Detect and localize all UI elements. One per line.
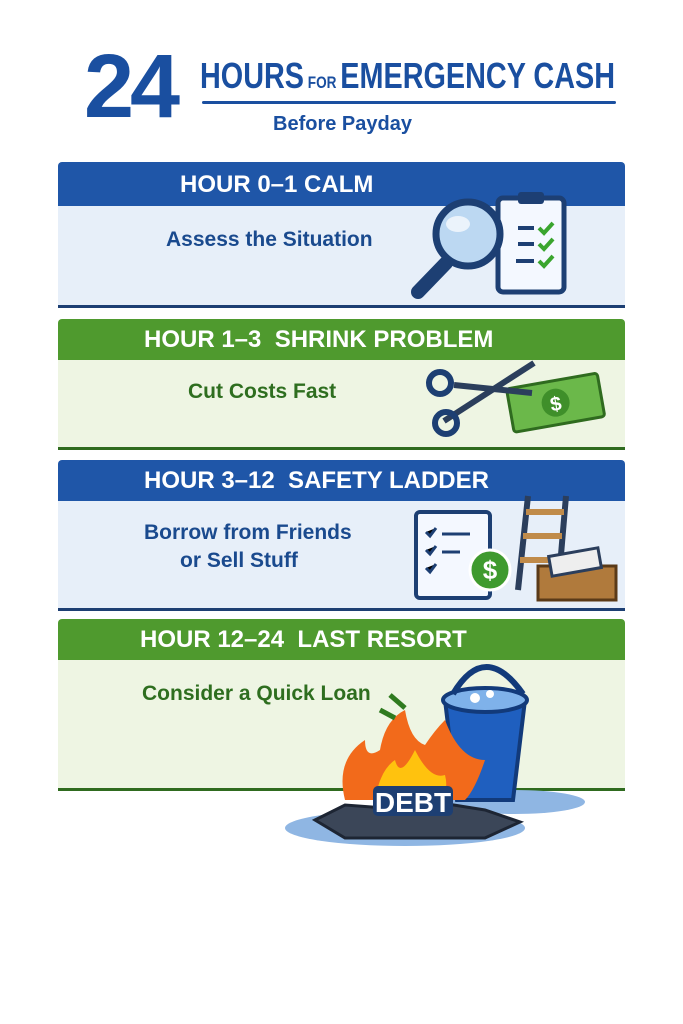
text: cut costs: Cut Costs Fast	[188, 380, 336, 403]
panel: hour 12-24	[58, 619, 625, 791]
icon: scissors and dollar	[426, 360, 606, 437]
panel: hour 1-3: HOUR 1–3 SHRINK PROBLEM	[144, 326, 493, 353]
icon: magnifier and clipboard	[411, 192, 566, 299]
icon: bucket dousing debt fire	[285, 664, 585, 846]
subtitle: Before Payday	[273, 113, 412, 135]
panel: hour 0-1	[58, 162, 625, 308]
panel: hour 3-12	[58, 460, 625, 611]
icon: scissors and dollar: $	[549, 393, 563, 416]
panel: hour 0-1: HOUR 0–1 CALM	[180, 171, 373, 198]
panel: hour 1-3	[58, 319, 625, 450]
panel: hour 12-24: HOUR 12–24 LAST RESORT	[140, 626, 467, 653]
icon: clipboard ladder box: $	[483, 555, 498, 585]
text: quick loan: Consider a Quick Loan	[142, 682, 371, 705]
text: borrow: or Sell Stuff	[180, 549, 298, 572]
text: assess: Assess the Situation	[166, 228, 373, 251]
panel: hour 3-12: HOUR 3–12 SAFETY LADDER	[144, 467, 489, 494]
text: borrow	[144, 521, 352, 572]
title number 24: 24	[84, 37, 176, 137]
icon: clipboard ladder box	[414, 496, 618, 602]
title	[84, 37, 616, 137]
title text: HOURS FOR EMERGENCY CASH	[200, 55, 615, 96]
text: borrow: Borrow from Friends	[144, 521, 352, 544]
icon: bucket dousing debt fire: DEBT	[375, 787, 451, 818]
